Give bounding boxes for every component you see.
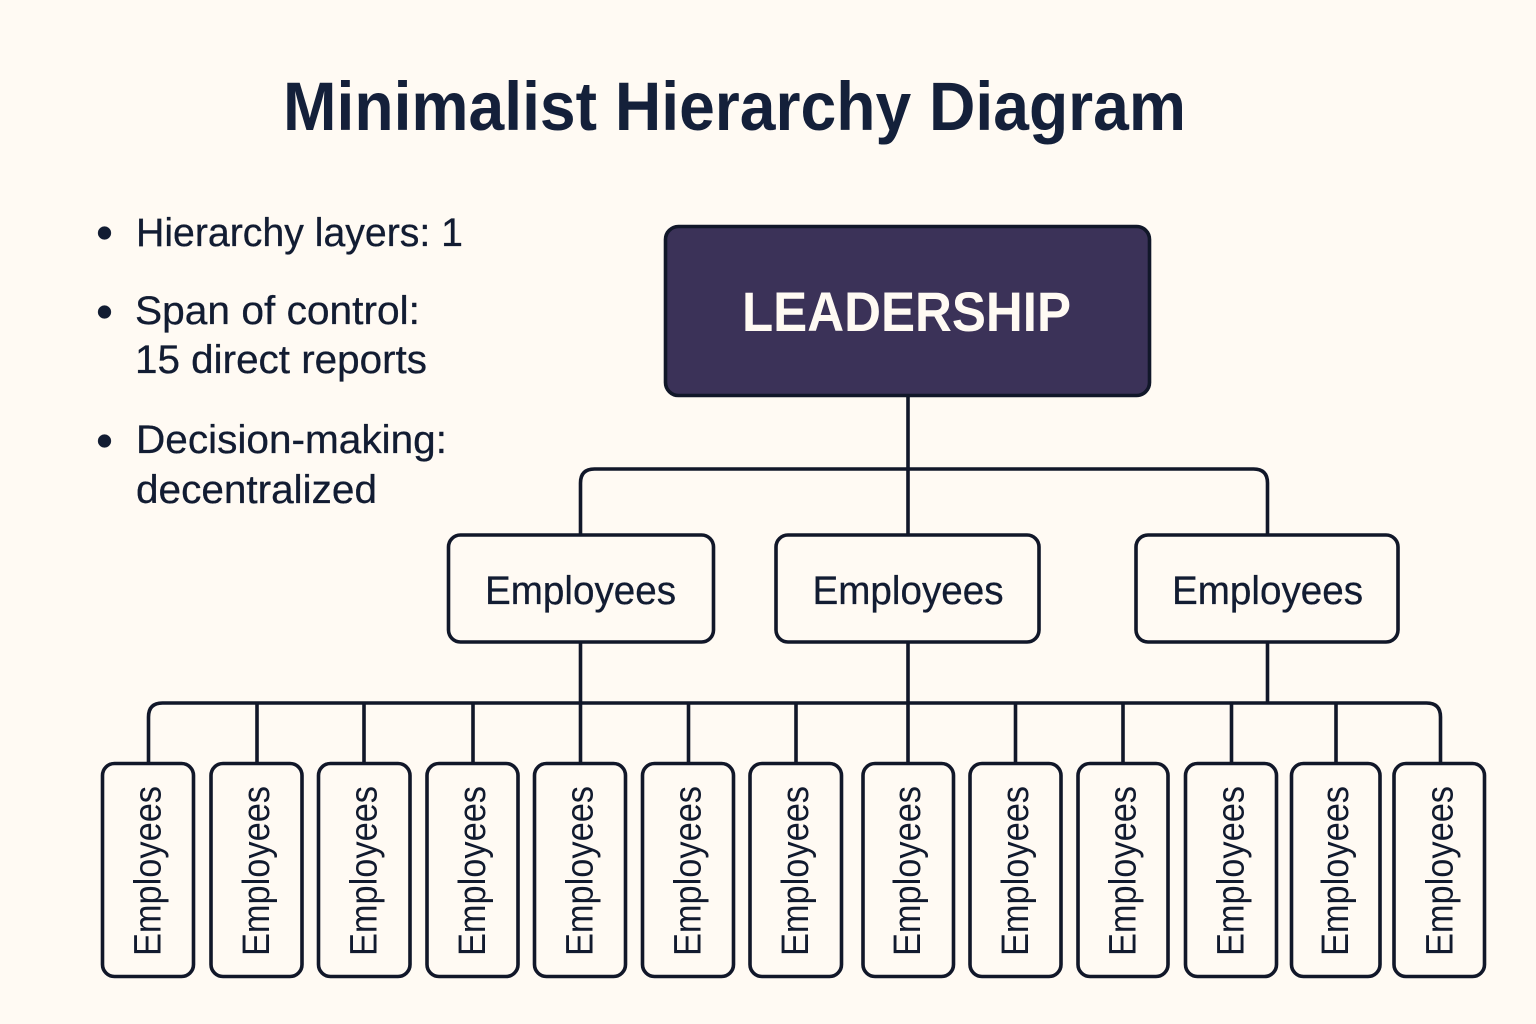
leadership box: LEADERSHIP [742, 280, 1071, 343]
bullet: decision-making: decentralized [136, 468, 377, 512]
employee box 10: Employees [1102, 786, 1144, 956]
bullet: hierarchy layers: Hierarchy layers: 1 [136, 211, 463, 255]
bullet: span of control: Span of control: [135, 289, 420, 333]
employee box 3 [318, 764, 410, 976]
employee box 4: Employees [452, 786, 494, 956]
employee box 5 [534, 764, 626, 976]
employee box 13: Employees [1420, 786, 1462, 956]
employee box 3: Employees [344, 786, 386, 956]
bottom row: vertical employee boxes [102, 764, 1484, 976]
title: Minimalist Hierarchy Diagram [283, 68, 1186, 145]
employee box 4 [427, 764, 518, 976]
employee box: left: Employees [485, 569, 676, 613]
employee box 6 [642, 764, 734, 976]
employee box 13 [1394, 764, 1484, 976]
employee box 2: Employees [236, 786, 278, 956]
bullet: span of control: 15 direct reports [135, 338, 427, 382]
connectors: leadership to middle employees [580, 396, 1268, 534]
employee box 12: Employees [1315, 786, 1357, 956]
employee box 10 [1078, 764, 1168, 976]
bullet list: key facts [98, 211, 463, 512]
employee box 7 [750, 764, 842, 976]
employee box: left [448, 535, 714, 642]
employee box 9 [970, 764, 1061, 976]
employee box 8: Employees [887, 786, 929, 956]
employee box: right [1136, 535, 1398, 642]
employee box: centre [776, 535, 1039, 642]
employee box 5: Employees [560, 786, 602, 956]
connectors: middle employees to bottom row [148, 642, 1440, 763]
bullet: decision-making [98, 418, 447, 512]
employee box 2 [211, 764, 302, 976]
employee box 6: Employees [668, 786, 710, 956]
employee box 12 [1292, 764, 1380, 976]
employee box 8 [863, 764, 954, 976]
employee box: centre: Employees [812, 569, 1004, 613]
employee box 11 [1186, 764, 1276, 976]
employee box 1 [102, 764, 194, 976]
employee box 1: Employees [128, 786, 170, 956]
bullet: span of control [98, 289, 427, 382]
employee box 11: Employees [1210, 786, 1252, 956]
bullet: decision-making: Decision-making: [136, 418, 447, 462]
leadership box [666, 226, 1150, 396]
middle row: employee boxes [448, 535, 1398, 642]
employee box: right: Employees [1172, 569, 1363, 613]
employee box 7: Employees [775, 786, 817, 956]
employee box 9: Employees [995, 786, 1037, 956]
